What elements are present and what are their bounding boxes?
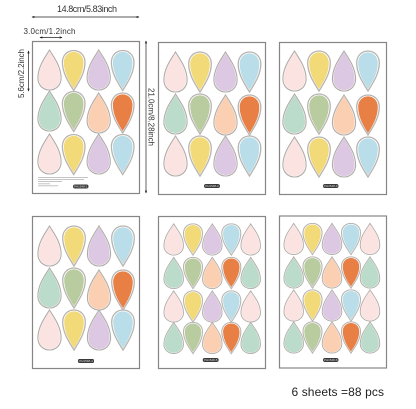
sticker sheet 2 — [158, 42, 266, 194]
row 1 drops — [283, 51, 379, 91]
sticker sheet 4 — [32, 216, 140, 368]
fine print — [38, 177, 88, 186]
sheet label: PH1548-2 — [205, 184, 219, 188]
row 1 drops — [38, 50, 134, 90]
row 3 drops — [283, 137, 379, 177]
row 1 drops — [284, 223, 380, 255]
sticker sheet 6 — [280, 216, 386, 368]
sheet label: PH1548-4 — [79, 359, 93, 363]
width dimension: 14.8cm/5.83inch — [32, 4, 139, 17]
row 3 drops — [38, 134, 134, 174]
row 1 drops — [164, 224, 260, 255]
sticker sheet 3 — [280, 42, 386, 194]
sheet label: PH1548-1 — [74, 185, 88, 189]
row 4 drops — [284, 322, 380, 353]
row 1 drops — [164, 52, 261, 92]
total count caption: 6 sheets =88 pcs — [292, 385, 384, 399]
row 2 drops — [284, 257, 380, 288]
row 2 drops — [283, 94, 379, 135]
row 3 drops — [284, 290, 380, 321]
drop width dimension: 3.0cm/1.2inch: 3.0cm/1.2inch — [24, 27, 76, 36]
sheet label: PH1548-5 — [204, 358, 218, 362]
row 4 drops — [164, 322, 260, 354]
sheet label: PH1548-6 — [324, 358, 338, 362]
sticker sheet 1 — [32, 42, 140, 194]
row 1 drops — [38, 226, 134, 266]
height dimension: 21.0cm/8.28inch: 21.0cm/8.28inch — [146, 88, 156, 146]
row 3 drops — [164, 291, 260, 322]
row 3 drops — [38, 310, 134, 350]
drop height dimension: 5.6cm/2.2inch: 5.6cm/2.2inch — [17, 49, 26, 98]
row 2 drops — [164, 257, 260, 289]
row 2 drops — [38, 268, 134, 310]
row 2 drops — [38, 91, 134, 133]
row 3 drops — [164, 136, 261, 176]
sticker sheet 5 — [158, 216, 266, 368]
width dimension: 14.8cm/5.83inch: 14.8cm/5.83inch — [57, 4, 117, 14]
sheet label: PH1548-3 — [324, 184, 338, 188]
row 2 drops — [164, 94, 261, 135]
